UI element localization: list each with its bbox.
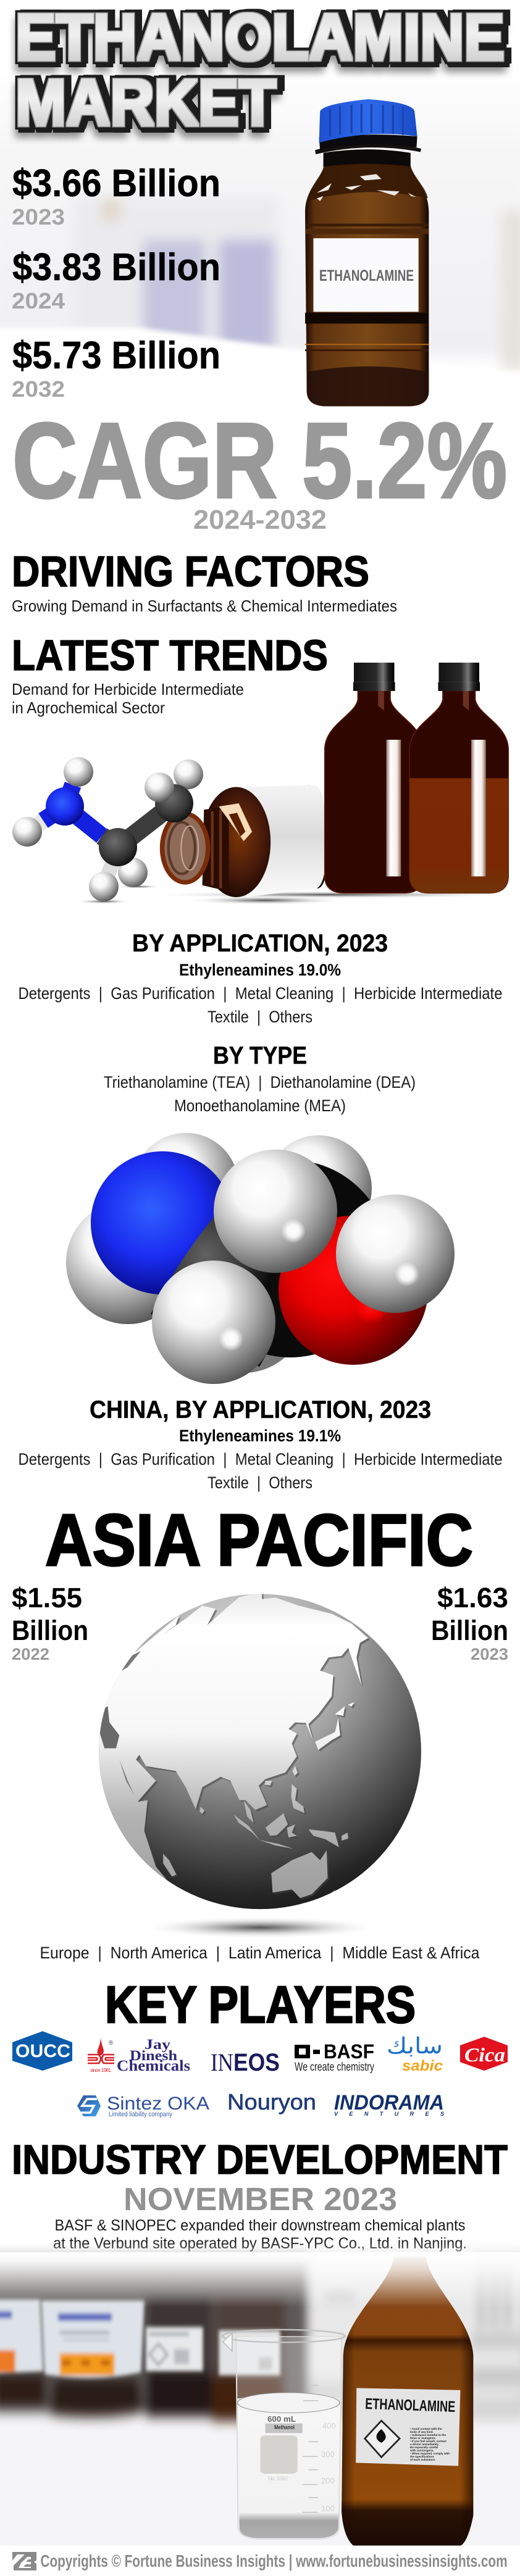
- text: other regions: Europe | North America | Latin America | Middle East & Africa: [40, 1944, 480, 1962]
- photo: lab bottles and beaker: 600 mL: [267, 2414, 296, 2424]
- logo: SABIC: sabic: [402, 2058, 443, 2074]
- logo: INEOS: IN: [211, 2048, 233, 2076]
- photo: lab bottles and beaker: 300: [321, 2450, 335, 2459]
- market size values: $3.83 Billion: [12, 246, 220, 289]
- stat: Asia Pacific 2022: [12, 1582, 88, 1663]
- illustration: amber bottles: [146, 663, 518, 905]
- globe shadow: [140, 1916, 380, 1939]
- logo: SABIC: [387, 2034, 443, 2074]
- stat: Asia Pacific 2023: 2023: [471, 1645, 508, 1663]
- stat: Asia Pacific 2022: $1.55: [12, 1582, 82, 1613]
- photo: lab bottles and beaker: fetus or mutagenic.: [410, 2437, 436, 2440]
- heading: driving factors: DRIVING FACTORS: [12, 547, 369, 595]
- stat: Asia Pacific 2023: [431, 1582, 508, 1663]
- logo: OUCC: OUCC: [15, 2041, 70, 2061]
- section: by application: Ethyleneamines 19.0%: [179, 961, 341, 979]
- photo: lab bottles and beaker: • When required, comply with: [410, 2452, 450, 2455]
- photo: lab bottles and beaker: Methanol: [274, 2424, 295, 2430]
- stat: Asia Pacific 2023: Billion: [431, 1615, 508, 1646]
- heading: key players: KEY PLAYERS: [105, 1976, 416, 2034]
- text: driving factor description: Growing Demand in Surfactants & Chemical Intermediates: [12, 597, 397, 615]
- photo: lab bottles and beaker: of each substance.: [410, 2458, 435, 2461]
- logo: Nouryon: Nouryon: [227, 2089, 316, 2114]
- photo: lab bottles and beaker: • If you feel unwell, contact: [410, 2440, 447, 2443]
- photo: lab bottles and beaker: the specifications: [410, 2455, 434, 2458]
- logo: Jay Dinesh Chemicals: Dinesh: [130, 2048, 177, 2063]
- logo: BASF: BASF: [324, 2040, 374, 2063]
- section: China by application: Textile | Others: [208, 1473, 312, 1492]
- section: by type: BY TYPE: [213, 1042, 307, 1069]
- logo: Indorama Ventures: INDORAMA: [334, 2091, 444, 2114]
- photo: lab bottles and beaker: 100: [321, 2504, 335, 2513]
- section: China by application: CHINA, BY APPLICATION, 2023: [90, 1396, 431, 1423]
- section: by application: BY APPLICATION, 2023: [132, 930, 388, 957]
- market size values: 2024: [12, 288, 65, 313]
- section: by type: [104, 1042, 416, 1115]
- logo: Jay Dinesh Chemicals: ®: [109, 2040, 114, 2047]
- logo: Jay Dinesh Chemicals: since 1981: [90, 2068, 112, 2073]
- section: by application: [19, 930, 503, 1026]
- market size values: [12, 162, 220, 402]
- logo: BASF: [295, 2040, 374, 2074]
- photo: lab bottles and beaker: 400: [322, 2421, 336, 2430]
- icon: Fortune Business Insights logo: [12, 2552, 36, 2570]
- logo: SABIC: سابك: [387, 2034, 443, 2059]
- section: by type: Monoethanolamine (MEA): [174, 1096, 346, 1115]
- market size values: $5.73 Billion: [12, 334, 220, 377]
- logo: OUCC: [12, 2031, 72, 2071]
- photo: lab bottles and beaker: with carcinogens.: [409, 2449, 434, 2452]
- text: latest trend description: in Agrochemical Sector: [12, 698, 165, 717]
- illustration: space filling molecule: [66, 1133, 455, 1384]
- heading: latest trends: LATEST TRENDS: [12, 631, 328, 679]
- photo: lab bottles and beaker: ETHANOLAMINE: [365, 2395, 456, 2416]
- photo: lab bottles and beaker: a doctor immediately.: [410, 2443, 439, 2446]
- logo: INEOS: EOS: [233, 2049, 280, 2076]
- stat: Asia Pacific 2023: $1.63: [437, 1582, 508, 1613]
- section: China by application: Ethyleneamines 19.1%: [179, 1427, 341, 1445]
- photo: lab bottles and beaker: Be especially careful: [410, 2446, 438, 2449]
- logo: Jay Dinesh Chemicals: Jay: [145, 2037, 171, 2052]
- logo: Jay Dinesh Chemicals: [88, 2037, 190, 2074]
- title: MARKET: [15, 65, 276, 139]
- photo: lab bottles and beaker: body of any kind.: [410, 2430, 434, 2433]
- logo: Sintez OKA: Sintez OKA: [107, 2094, 209, 2114]
- date: NOVEMBER 2023: [124, 2182, 397, 2218]
- stat: Asia Pacific 2022: 2022: [12, 1645, 49, 1663]
- photo: lab bottles and beaker: • Avoid contact with the: [410, 2427, 442, 2430]
- text: latest trend description: [12, 680, 244, 717]
- section: by type: Triethanolamine (TEA) | Diethanolamine (DEA): [104, 1073, 416, 1091]
- heading: Asia Pacific: ASIA PACIFIC: [45, 1499, 473, 1581]
- market size values: $3.66 Billion: [12, 162, 220, 205]
- section: China by application: [19, 1396, 503, 1492]
- logo: INEOS: [211, 2048, 280, 2076]
- market size values: 2032: [12, 376, 65, 402]
- photo: lab bottles and beaker: [0, 2252, 520, 2546]
- photo: lab bottles and beaker: 200: [321, 2476, 335, 2485]
- text: development description: BASF & SINOPEC expanded their downstream chemical plants: [54, 2217, 466, 2234]
- section: by application: Textile | Others: [208, 1008, 312, 1026]
- icon: amber bottle with blue cap: ETHANOLAMINE: [319, 267, 414, 284]
- panel: hero background: [0, 56, 520, 420]
- title: [15, 0, 505, 139]
- logo: Sintez OKA: [77, 2094, 209, 2118]
- text: development description: [53, 2217, 467, 2252]
- logo: Cica: Cica: [464, 2044, 505, 2066]
- CAGR period: 2024-2032: [193, 505, 327, 535]
- icon: amber bottle with blue cap: [305, 99, 429, 406]
- logo: Cica: [460, 2037, 508, 2071]
- photo: lab bottles and beaker: • Substance harmful to the: [410, 2433, 446, 2437]
- illustration: globe: [93, 1591, 421, 1914]
- logo: Sintez OKA: Limited liability company: [109, 2111, 172, 2118]
- logo: Indorama Ventures: VENTURES: [334, 2111, 444, 2117]
- market size values: 2023: [12, 204, 65, 230]
- logo: Jay Dinesh Chemicals: Chemicals: [117, 2058, 190, 2074]
- photo: lab bottles and beaker: No. 1060: [268, 2475, 288, 2482]
- stat: Asia Pacific 2022: Billion: [12, 1615, 88, 1646]
- text: latest trend description: Demand for Herbicide Intermediate: [12, 680, 244, 698]
- logo: BASF: We create chemistry: [295, 2061, 374, 2074]
- illustration: ball and stick molecule: [12, 757, 203, 904]
- footer band: [0, 2546, 520, 2576]
- text: development description: at the Verbund site operated by BASF-YPC Co., Ltd. in Nanjing.: [53, 2235, 467, 2252]
